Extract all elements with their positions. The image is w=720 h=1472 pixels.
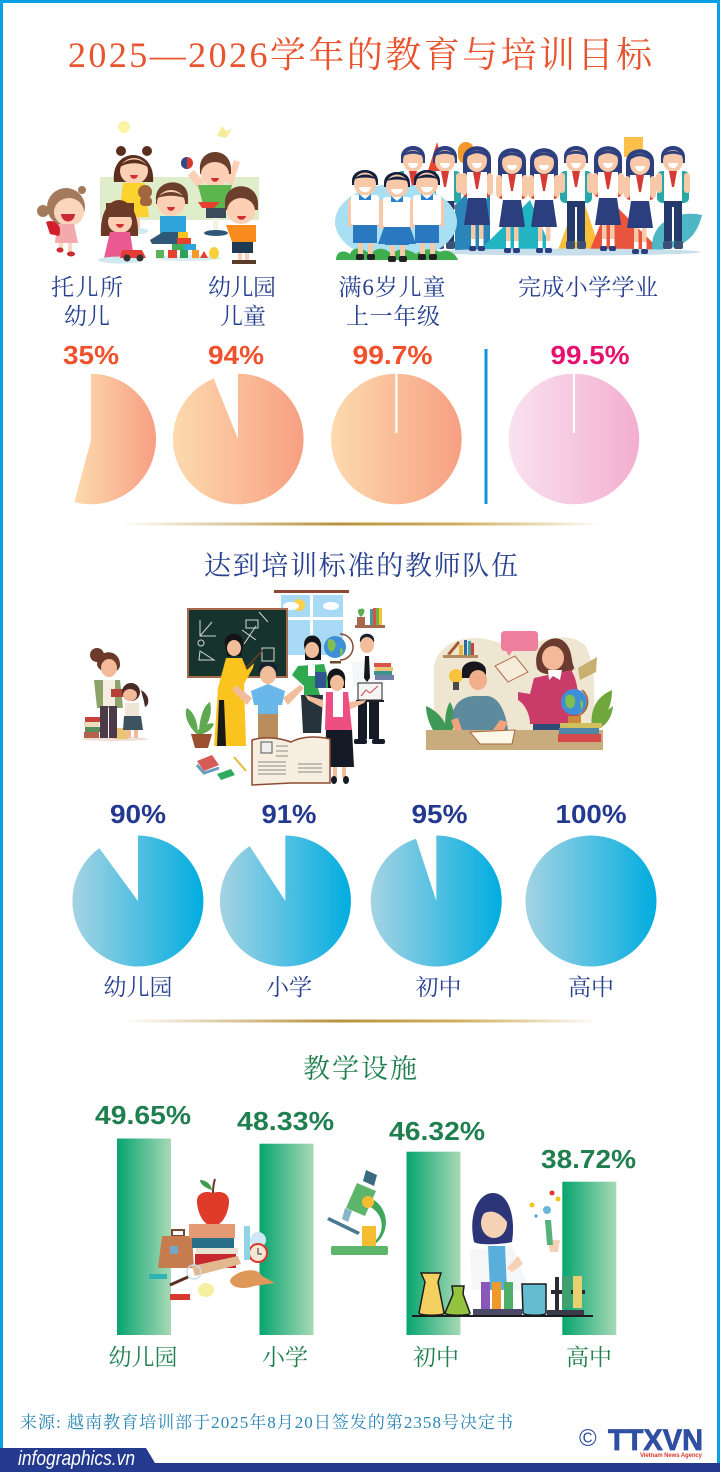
illustration: group of teachers	[186, 590, 394, 785]
left plants	[426, 702, 454, 732]
label: kindergarten: 幼儿园	[108, 1345, 178, 1370]
label: primary completion: 完成小学学业	[518, 275, 658, 300]
speech bubble	[501, 631, 538, 656]
heading: qualified teachers: 达到培训标准的教师队伍	[204, 551, 518, 581]
notebook	[470, 730, 515, 744]
agency name: TTXVN	[608, 1424, 703, 1457]
front row of pupils	[348, 170, 444, 262]
child	[122, 683, 148, 738]
small flask	[445, 1286, 470, 1315]
beaker	[522, 1284, 546, 1315]
agency subtitle: Vietnam News Agency	[640, 1453, 703, 1459]
value 38.72%: 38.72%	[541, 1144, 636, 1174]
idea bulb	[198, 1283, 214, 1297]
illustration: teacher with child	[82, 648, 148, 741]
colourful background shapes	[422, 137, 702, 256]
label: kindergarten: 幼儿园	[208, 275, 276, 300]
value 91%: 91%	[262, 799, 316, 829]
sun	[118, 121, 130, 133]
source note: 来源: 越南教育培训部于2025年8月20日签发的第2358号决定书	[20, 1412, 513, 1432]
pie: 91%	[220, 835, 351, 966]
book pile	[197, 755, 246, 780]
large flask	[419, 1273, 444, 1315]
girl with teddy bear	[114, 146, 153, 234]
value 49.65%: 49.65%	[95, 1100, 191, 1130]
bar: kindergarten	[117, 1138, 171, 1335]
briefcase	[158, 1230, 194, 1268]
wall shelf with books	[355, 608, 385, 628]
right plants	[592, 690, 613, 730]
red marker	[170, 1294, 190, 1300]
bar: lower secondary	[406, 1152, 460, 1335]
pie: 99.5%	[509, 374, 639, 504]
facility level labels	[108, 1345, 612, 1370]
pie: 94%	[173, 374, 304, 504]
woman in green	[292, 635, 330, 733]
alarm clock	[249, 1232, 267, 1262]
laptop	[356, 683, 384, 702]
sparkles	[530, 1190, 560, 1218]
pie: 99.7%	[331, 374, 462, 504]
illustration: microscope	[327, 1170, 388, 1255]
objective	[342, 1208, 352, 1222]
teacher level labels	[104, 975, 614, 1000]
bushes	[336, 249, 458, 260]
copyright mark: ©	[579, 1425, 597, 1452]
title: 2025—2026学年的教育与培训目标	[68, 35, 653, 75]
back row of pupils	[396, 146, 690, 254]
label: upper secondary: 高中	[566, 1345, 612, 1370]
teacher in yellow ao dai	[214, 634, 263, 746]
value 99.7%: 99.7%	[352, 340, 432, 370]
copyright and agency logo	[579, 1424, 703, 1459]
man in blue shirt	[232, 662, 304, 738]
separator line	[484, 349, 488, 504]
desk globe	[561, 689, 588, 723]
book stack	[84, 717, 128, 739]
label: lower secondary: 初中	[413, 1345, 459, 1370]
teacher	[90, 648, 125, 738]
base	[331, 1246, 388, 1255]
percent labels: enrolment	[63, 340, 630, 370]
pie: 35%	[74, 374, 156, 504]
bar: primary	[260, 1144, 314, 1335]
globe	[324, 634, 353, 664]
illustration: preschool children playing	[37, 121, 259, 264]
age group labels	[51, 275, 658, 329]
book pile on desk	[558, 723, 602, 742]
site name: infographics.vn	[18, 1448, 135, 1470]
focus knob	[362, 1196, 374, 1208]
pie: 90%	[72, 836, 203, 966]
pie: 95%	[371, 836, 502, 966]
illustration: school supplies	[149, 1179, 275, 1300]
open book held	[495, 656, 528, 682]
value 90%: 90%	[110, 799, 166, 829]
label: nursery: 托儿所	[51, 275, 123, 300]
window	[274, 590, 349, 655]
woman in pink jacket	[305, 668, 366, 784]
boy in blue shirt	[150, 182, 188, 244]
label: primary: 小学	[266, 975, 312, 1000]
value 99.5%: 99.5%	[550, 340, 630, 370]
paint palette	[230, 1270, 275, 1288]
tube stand	[547, 1276, 585, 1316]
label: kindergarten: 幼儿园	[104, 975, 172, 1000]
label: nursery second line: 幼儿	[64, 304, 110, 329]
tube	[346, 1183, 376, 1216]
label: six year olds: 满6岁儿童	[338, 275, 446, 300]
percent labels: facilities	[95, 1100, 636, 1174]
eyepiece	[363, 1170, 377, 1186]
label: first grade: 上一年级	[346, 304, 440, 329]
shelf with books	[443, 640, 478, 658]
lab bench	[412, 1315, 593, 1317]
sitting girl with toy car	[98, 200, 146, 264]
bar: upper secondary	[562, 1182, 616, 1335]
value 35%: 35%	[63, 340, 119, 370]
teal pencil	[149, 1274, 167, 1279]
apple	[197, 1179, 229, 1226]
toddler girl	[37, 186, 86, 256]
test tube rack	[473, 1282, 522, 1316]
cream backdrop	[434, 637, 594, 730]
light bulb	[449, 669, 463, 690]
label: primary: 小学	[262, 1345, 308, 1370]
value 94%: 94%	[208, 340, 264, 370]
man in white shirt	[352, 634, 385, 744]
arm	[366, 1200, 386, 1246]
toy blocks	[155, 232, 221, 261]
pie: 100%	[526, 836, 656, 966]
heading: teaching facilities: 教学设施	[303, 1054, 417, 1084]
student	[451, 662, 508, 732]
percent labels: teachers	[110, 799, 626, 829]
blackboard	[188, 609, 287, 677]
tutor	[518, 638, 579, 730]
stand clamp	[362, 1226, 376, 1246]
value 95%: 95%	[412, 799, 468, 829]
gold divider	[120, 1020, 600, 1022]
label: kindergarten second line: 儿童	[220, 304, 266, 329]
magnifier	[170, 1265, 201, 1285]
potted plant	[186, 702, 214, 748]
stage	[327, 1217, 360, 1235]
boy in green shirt with ball	[181, 152, 240, 236]
value 48.33%: 48.33%	[237, 1106, 334, 1136]
book pile	[189, 1224, 241, 1276]
illustration: scientist and lab equipment	[412, 1190, 593, 1317]
butterfly	[217, 126, 232, 138]
value 100%: 100%	[556, 799, 626, 829]
open book	[252, 737, 330, 785]
blue backdrop behind front pupils	[335, 184, 457, 260]
test tube	[244, 1226, 250, 1260]
label: lower secondary: 初中	[416, 975, 462, 1000]
navy bar	[0, 1448, 720, 1472]
boy in orange shirt	[225, 186, 258, 264]
label: upper secondary: 高中	[568, 975, 614, 1000]
desk	[426, 730, 603, 750]
value 46.32%: 46.32%	[389, 1116, 485, 1146]
footer bar with site name	[0, 1448, 720, 1472]
room backdrop	[100, 177, 259, 220]
book stack	[374, 663, 394, 680]
scientist	[470, 1193, 560, 1290]
illustration: tutor and student at a desk	[426, 631, 613, 750]
gold divider	[120, 522, 600, 526]
illustration: primary school pupils	[335, 137, 702, 262]
flying book	[578, 657, 597, 680]
